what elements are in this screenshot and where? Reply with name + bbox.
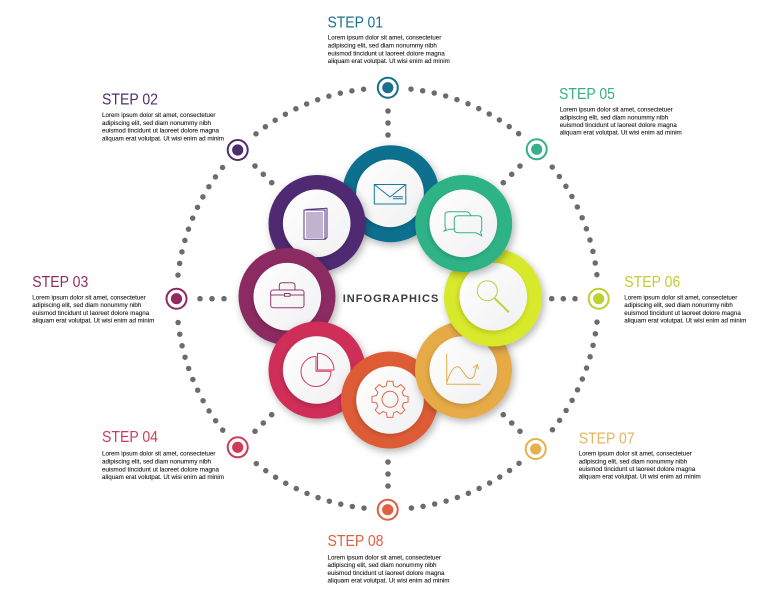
text block: step 03: aliquam erat volutpat. Ut wisi enim ad minim xyxy=(32,318,155,325)
text block: step 03: STEP 03 xyxy=(32,274,88,291)
text block: step 06: aliquam erat volutpat. Ut wisi enim ad minim xyxy=(624,318,747,325)
icon: pie chart xyxy=(301,353,334,386)
text block: step 08: Lorem ipsum dolor sit amet, consectetuer xyxy=(328,555,442,562)
text block: step 04: Lorem ipsum dolor sit amet, consectetuer xyxy=(102,451,216,458)
text block: step 02 xyxy=(102,91,224,142)
icon: briefcase xyxy=(271,283,304,308)
ring: lime magnifier xyxy=(444,248,542,346)
text block: step 08: adipiscing elit, sed diam nonummy nibh xyxy=(328,562,437,569)
ring: plum briefcase xyxy=(238,248,336,345)
text block: step 05: STEP 05 xyxy=(559,86,615,103)
ring: orange gear xyxy=(341,352,438,448)
text block: step 06 xyxy=(624,274,747,325)
ring: green chat xyxy=(415,175,512,272)
text block: step 05: adipiscing elit, sed diam nonummy nibh xyxy=(560,114,669,121)
text block: step 03 xyxy=(32,274,155,325)
text block: step 03: adipiscing elit, sed diam nonummy nibh xyxy=(32,302,142,309)
icon: document xyxy=(304,208,327,239)
text block: step 06: Lorem ipsum dolor sit amet, consectetuer xyxy=(624,294,738,301)
text block: step 08: aliquam erat volutpat. Ut wisi enim ad minim xyxy=(328,578,450,585)
text block: step 04: STEP 04 xyxy=(102,429,158,446)
icon: gear xyxy=(372,381,408,417)
text block: step 01 xyxy=(328,14,450,65)
node: step 01 xyxy=(378,78,398,98)
text block: step 04: adipiscing elit, sed diam nonummy nibh xyxy=(102,459,211,466)
text block: step 01: euismod tincidunt ut laoreet dolore magna xyxy=(328,50,445,57)
text block: step 02: Lorem ipsum dolor sit amet, consectetuer xyxy=(102,112,216,119)
dotted outer ring xyxy=(146,57,629,540)
radial connector dots xyxy=(197,108,578,489)
text block: step 03: Lorem ipsum dolor sit amet, consectetuer xyxy=(32,294,147,301)
text block: step 07: adipiscing elit, sed diam nonummy nibh xyxy=(579,458,688,465)
text block: step 08: STEP 08 xyxy=(328,533,384,550)
text block: step 05: euismod tincidunt ut laoreet dolore magna xyxy=(560,122,677,129)
text block: step 07: STEP 07 xyxy=(579,430,635,447)
node: step 04 xyxy=(228,437,248,457)
ring: purple document xyxy=(268,175,366,272)
text block: step 08 xyxy=(328,533,450,585)
node: step 05 xyxy=(527,139,547,159)
text block: step 05: Lorem ipsum dolor sit amet, consectetuer xyxy=(560,106,673,113)
text block: step 06: euismod tincidunt ut laoreet dolore magna xyxy=(624,310,741,317)
text block: step 08: euismod tincidunt ut laoreet dolore magna xyxy=(328,570,445,577)
text block: step 03: euismod tincidunt ut laoreet dolore magna xyxy=(32,310,150,317)
text block: step 04: euismod tincidunt ut laoreet dolore magna xyxy=(102,466,219,473)
text block: step 07: Lorem ipsum dolor sit amet, consectetuer xyxy=(579,450,692,457)
ring: red pie chart xyxy=(268,322,366,418)
text block: step 01: STEP 01 xyxy=(328,14,383,31)
text block: step 06: STEP 06 xyxy=(624,274,680,291)
node markers xyxy=(166,78,609,520)
ring cluster xyxy=(238,145,542,448)
text block: step 02: adipiscing elit, sed diam nonummy nibh xyxy=(102,120,211,127)
icon: chat bubbles xyxy=(444,212,482,236)
node: step 08 xyxy=(378,500,398,520)
text block: step 01: aliquam erat volutpat. Ut wisi enim ad minim xyxy=(328,58,450,65)
icon: line chart xyxy=(447,354,480,384)
icon: magnifier xyxy=(477,281,508,312)
text block: step 02: euismod tincidunt ut laoreet dolore magna xyxy=(102,128,219,135)
text block: step 06: adipiscing elit, sed diam nonummy nibh xyxy=(624,302,733,309)
text block: step 01: adipiscing elit, sed diam nonummy nibh xyxy=(328,42,437,49)
text block: step 02: STEP 02 xyxy=(102,91,158,108)
ring: teal mail xyxy=(342,145,439,242)
icon: envelope xyxy=(374,184,406,204)
node: step 07 xyxy=(526,439,546,459)
text block: step 05: aliquam erat volutpat. Ut wisi enim ad minim xyxy=(560,130,682,137)
node: step 03 xyxy=(166,289,186,309)
text block: step 02: aliquam erat volutpat. Ut wisi enim ad minim xyxy=(102,135,224,142)
text block: step 01: Lorem ipsum dolor sit amet, consectetuer xyxy=(328,34,442,41)
text block: step 05 xyxy=(559,86,682,137)
ring: amber line chart xyxy=(415,322,512,418)
text block: step 07 xyxy=(579,430,701,481)
center title: INFOGRAPHICS xyxy=(343,293,438,305)
text block: step 04: aliquam erat volutpat. Ut wisi enim ad minim xyxy=(102,474,224,481)
text block: step 07: aliquam erat volutpat. Ut wisi enim ad minim xyxy=(579,474,701,481)
node: step 06 xyxy=(589,289,609,309)
text block: step 04 xyxy=(102,429,224,481)
text block: step 07: euismod tincidunt ut laoreet dolore magna xyxy=(579,466,696,473)
node: step 02 xyxy=(228,140,248,160)
